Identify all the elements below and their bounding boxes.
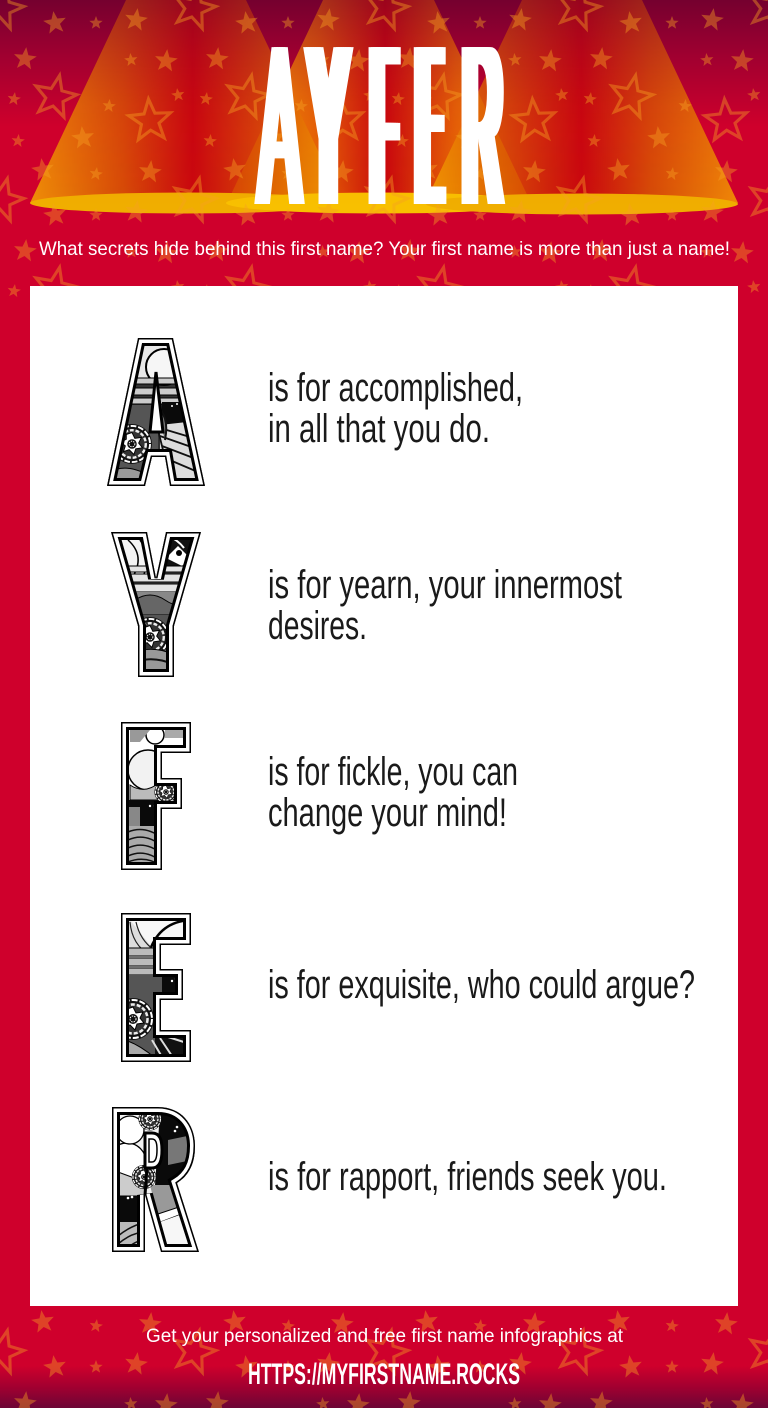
title: first name: Y [309,0,348,253]
text: letter A line: is for accomplished, [268,366,523,410]
text: letter F line: change your mind! [268,791,507,835]
letter F illustration [120,720,192,872]
title: first name: R [463,0,502,253]
subtitle: What secrets hide behind this first name? Your first name is more than just a name! [39,238,730,260]
title: first name: E [418,0,441,253]
title: first name: A [259,0,300,253]
panel: white content area [30,286,738,1306]
footer invitation text: Get your personalized and free first name infographics at [146,1326,624,1347]
star pattern bottom [0,1306,768,1408]
title: first name: F [372,0,396,253]
text: letter A line: in all that you do. [268,407,490,451]
spotlights: three cones with elliptical pools [30,0,738,214]
text: letter Y line: is for yearn, your innermost [268,563,622,607]
letter E illustration [121,913,191,1062]
footer url: HTTPS://MYFIRSTNAME.ROCKS [248,1358,520,1391]
letter R illustration [112,1107,199,1252]
star pattern top [0,0,768,302]
title: first name [254,0,506,253]
text: letter F line: is for fickle, you can [268,750,518,794]
text: letter Y line: desires. [268,604,367,648]
letter Y illustration [110,530,202,680]
letter A illustration [105,336,207,488]
